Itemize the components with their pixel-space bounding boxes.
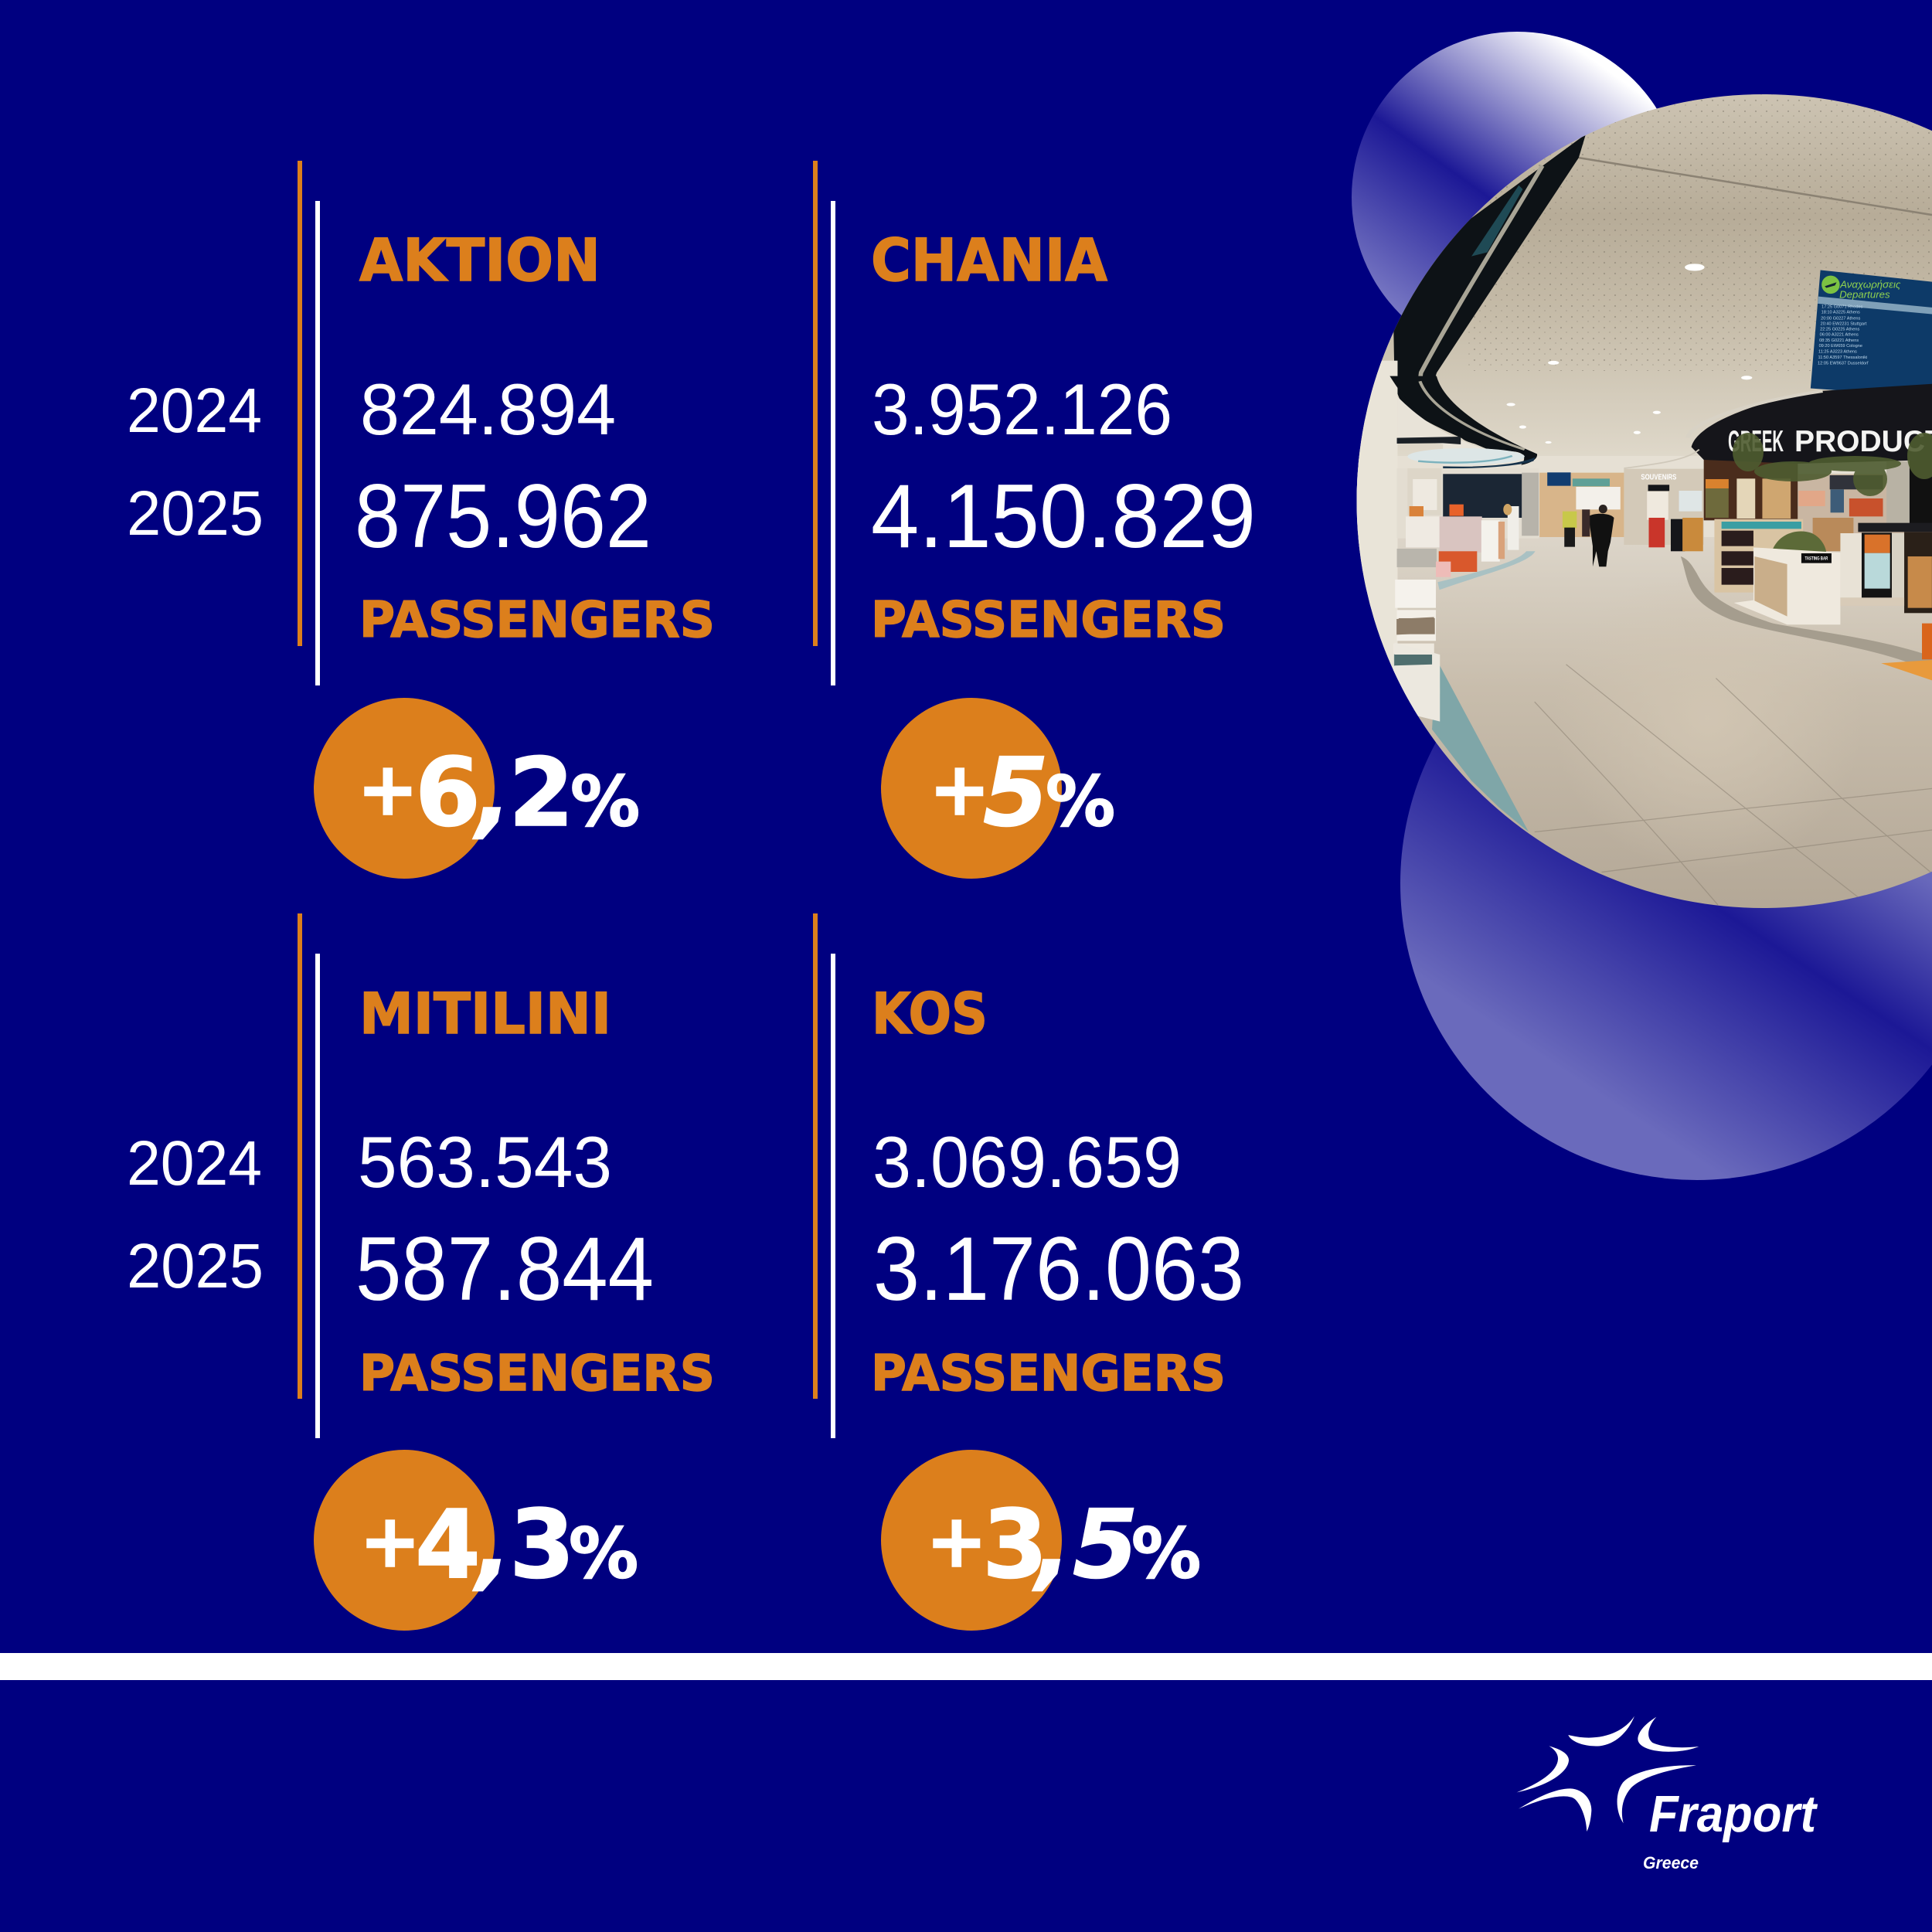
growth value: + [359,1499,421,1584]
heading: AKTION [359,226,600,294]
orange divider [298,161,302,646]
shops and concourse details: SOUVENIRS [1641,473,1676,481]
departures board [1811,270,1932,397]
departures board: 20:00 G0227 Athens [1821,316,1860,321]
orange divider [813,161,818,646]
orange divider [813,913,818,1399]
departures board: 06:00 A3221 Athens [1820,333,1859,338]
floor [1352,537,1932,916]
dark overhead ceiling over shops [1692,384,1932,464]
growth circle [314,1450,495,1631]
growth value: 2 [509,738,574,848]
year 2024: 2024 [127,376,262,446]
growth value: 3 [982,1490,1048,1600]
departures board: 09:20 EW659 Cologne [1819,344,1862,349]
departures board: 17:25 G0071 Rhodes [1821,304,1863,309]
back wall [1352,456,1932,549]
green plant on island [1773,531,1826,553]
year 2025: 2025 [127,1231,264,1301]
white divider [315,201,320,685]
departures board: 12:05 EW9637 Dusseldorf [1818,361,1869,366]
souvenirs pillar [1624,469,1704,545]
wine island [1714,519,1803,593]
tasting counter [1734,547,1840,624]
white divider [831,954,835,1438]
growth value: + [926,1499,988,1584]
orange divider [298,913,302,1399]
growth value: , [1032,1490,1071,1600]
white horizontal band [0,1653,1932,1680]
value 2024: 563.543 [358,1121,612,1202]
ceiling seam and ribbon [1393,134,1932,462]
departures board: 08:35 G0221 Athens [1819,338,1859,343]
teal floor curve [1437,551,1536,590]
grey floor inlay [1681,556,1932,672]
heading: MITILINI [359,981,611,1047]
shop sign: GREEK PRODUCTS: GREEK [1728,425,1784,458]
growth circle [881,698,1062,879]
passenger in yellow vest [1563,512,1577,528]
left bay ceiling fixture [1397,397,1524,462]
panel: MITILINI [127,913,715,1631]
shop sign: GREEK PRODUCTS [1728,430,1932,451]
panel: KOS [813,913,1244,1631]
departures board: 11:25 A3223 Athens [1818,350,1857,355]
passengers label: PASSENGERS [871,1345,1226,1403]
growth value: % [569,1513,638,1594]
floor tiles and left side [1395,617,1932,905]
back wood wall [1539,473,1624,537]
growth value: % [1131,1513,1201,1594]
panel: CHANIA [813,161,1256,879]
shops and concourse details: TASTING BAR [1805,556,1828,561]
ceiling perforation texture [1468,93,1932,371]
white divider [831,201,835,685]
departures board: Departures [1839,289,1890,301]
growth value: 3 [509,1490,575,1600]
logo wordmark: Fraport [1649,1785,1818,1843]
walking passenger [1588,514,1614,566]
departures board: 11:50 A3597 Thessaloniki [1818,355,1867,360]
departures board: 22:25 G0225 Athens [1820,328,1859,332]
year 2024: 2024 [127,1128,262,1199]
value 2025: 875.962 [355,465,651,566]
departures board: 20:40 EW2231 Stuttgart [1821,321,1867,326]
growth value: 6 [415,738,481,848]
growth circle [881,1450,1062,1631]
passengers label: PASSENGERS [359,1345,715,1403]
growth value: % [570,761,640,842]
orange mat [1881,660,1932,681]
shops and concourse details [1354,361,1932,721]
left shop displays [1449,505,1464,516]
photo: airport terminal shops in circular frame [1352,93,1932,916]
year 2025: 2025 [127,478,264,549]
left wall [1357,360,1397,679]
growth value: % [1046,761,1115,842]
value 2025: 3.176.063 [873,1218,1244,1319]
value 2024: 3.069.659 [872,1121,1182,1202]
floor highlight [1649,696,1767,807]
dark wood shop [1704,460,1798,520]
growth value: 4 [415,1490,481,1600]
growth circle [314,698,495,879]
growth value: , [472,1490,512,1600]
value 2025: 4.150.829 [871,465,1256,566]
digital display [1840,533,1862,597]
passenger head [1599,505,1607,513]
logo sub-label: Greece [1643,1853,1699,1872]
value 2024: 824.894 [360,369,616,450]
white divider [315,954,320,1438]
white stacked display units [1395,580,1436,608]
growth value: 5 [983,738,1049,848]
passengers label: PASSENGERS [359,592,715,649]
heading: KOS [872,981,988,1047]
value 2025: 587.844 [355,1218,654,1319]
heading: CHANIA [871,226,1107,294]
decorative circle: bottom gradient [1400,587,1932,1180]
ceiling [1352,93,1932,502]
logo: Fraport Greece [1517,1716,1818,1872]
departures board: 18:10 A3225 Athens [1821,311,1860,315]
logo mark swooshes [1517,1716,1699,1832]
hanging plants [1733,433,1932,496]
departures board: Αναχωρήσεις [1839,278,1901,290]
passengers label: PASSENGERS [871,592,1226,649]
growth value: + [929,747,991,832]
growth value: 5 [1073,1490,1138,1600]
growth value: , [472,738,512,848]
growth value: + [357,747,419,832]
right shops [1798,474,1932,536]
value 2024: 3.952.126 [872,369,1172,450]
panel: AKTION [127,161,715,879]
decorative circle: top gradient [1352,32,1682,362]
